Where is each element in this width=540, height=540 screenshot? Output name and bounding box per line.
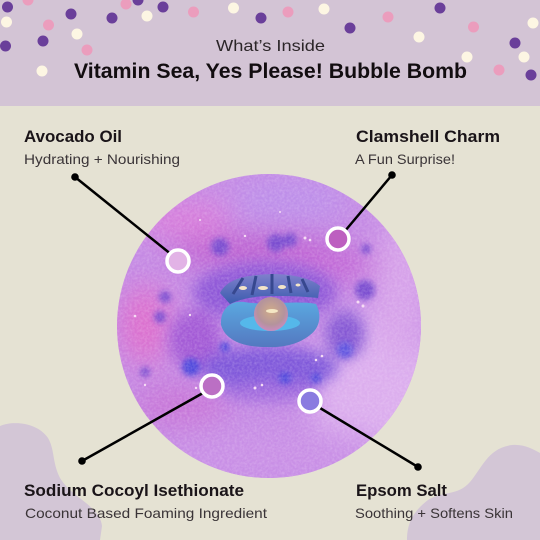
label: Clamshell Charm [356, 127, 500, 146]
callout: epsom salt [299, 390, 513, 521]
right corner blob [407, 445, 540, 540]
pearl [254, 297, 288, 331]
connector line [345, 171, 396, 231]
description: Soothing + Softens Skin [355, 505, 513, 521]
left corner blob [0, 423, 102, 540]
sparkles [134, 211, 364, 390]
label: Sodium Cocoyl Isethionate [24, 481, 244, 500]
description: A Fun Surprise! [355, 151, 455, 167]
connector line [78, 393, 203, 465]
callout: avocado oil [24, 127, 189, 272]
connector line [71, 173, 172, 255]
label: Avocado Oil [24, 127, 122, 146]
marker [201, 375, 223, 397]
description: Coconut Based Foaming Ingredient [25, 505, 267, 521]
clamshell charm [220, 274, 320, 347]
description: Hydrating + Nourishing [24, 151, 180, 167]
header panel [0, 0, 540, 106]
bubble bomb photo [117, 174, 421, 478]
marker [299, 390, 321, 412]
label: Epsom Salt [356, 481, 447, 500]
callout: clamshell charm [327, 127, 500, 250]
marker [327, 228, 349, 250]
title: Vitamin Sea, Yes Please! Bubble Bomb [74, 60, 467, 83]
confetti dots [0, 0, 538, 80]
callout: sodium cocoyl isethionate [24, 375, 267, 521]
subtitle: What’s Inside [216, 38, 325, 55]
connector line [320, 408, 422, 471]
marker [167, 250, 189, 272]
